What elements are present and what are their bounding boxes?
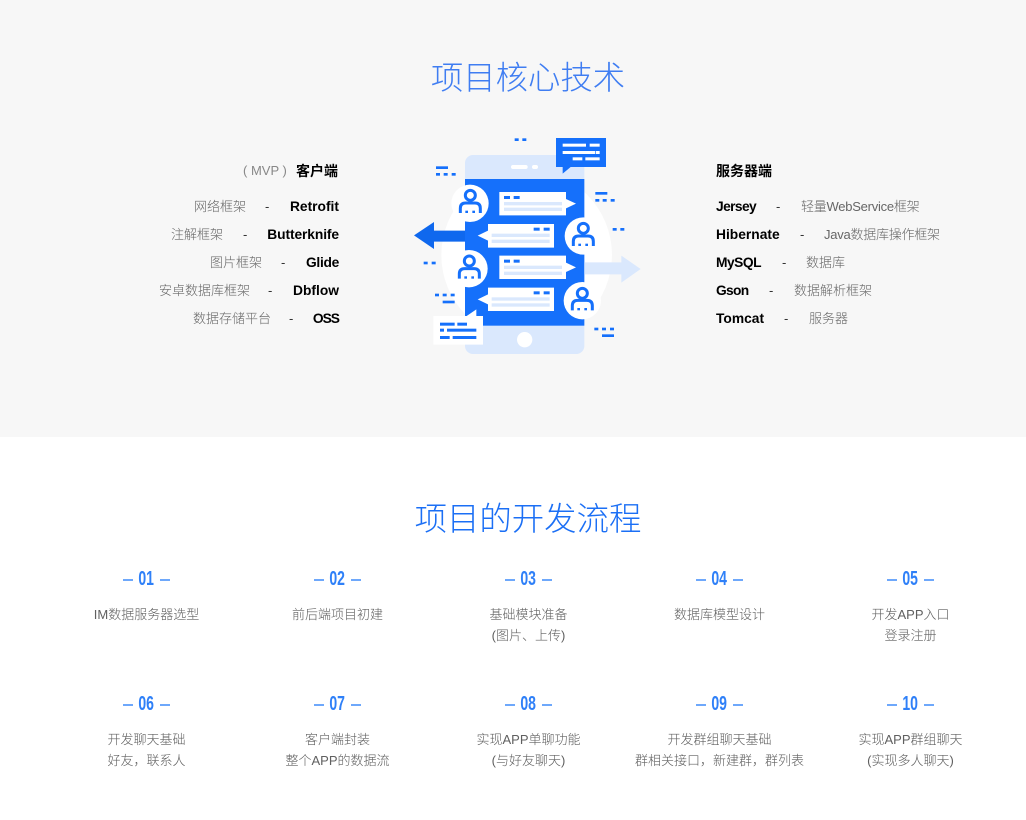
server row: Tomcat: 服务器 [809, 311, 848, 326]
client row: Dbflow [159, 283, 339, 298]
speech bubble bottom [433, 309, 483, 345]
server row: Tomcat: Tomcat [716, 311, 764, 326]
step 03: (图片、上传) [492, 628, 565, 643]
client row: Butterknife [171, 227, 339, 242]
heading: client [243, 163, 338, 179]
client row: Dbflow: - [268, 283, 272, 298]
step 07: 07 [330, 693, 345, 715]
client row: Glide: 图片框架 [210, 255, 262, 270]
step 10: 实现APP群组聊天 [858, 732, 962, 747]
client row: OSS: - [289, 311, 293, 326]
step 09 [635, 693, 804, 768]
client row: Glide [210, 255, 339, 270]
step 06: 好友，联系人 [107, 753, 186, 768]
step 09: 09 [712, 693, 727, 715]
client row: Retrofit [194, 199, 339, 214]
title: development process: 项目的开发流程 [415, 501, 641, 537]
step 08: 实现APP单聊功能 [476, 732, 580, 747]
step 02: 02 [330, 568, 345, 590]
step 01 [94, 568, 199, 622]
server row: Tomcat [716, 311, 848, 326]
server row: Jersey: Jersey [716, 199, 756, 214]
step 02 [292, 568, 383, 622]
heading: client: ( MVP ) [243, 163, 287, 178]
step 05: 开发APP入口 [871, 607, 950, 622]
server row: Tomcat: - [784, 311, 788, 326]
arrow left [414, 222, 465, 249]
heading: server: 服务器端 [716, 163, 772, 179]
server row: Jersey: 轻量WebService框架 [801, 199, 919, 214]
step 08 [476, 693, 580, 768]
step 04 [674, 568, 765, 622]
server row: MySQL [716, 255, 845, 270]
heading: client: 客户端 [296, 163, 338, 179]
step 10: (实现多人聊天) [867, 753, 954, 768]
server row: MySQL: 数据库 [806, 255, 845, 270]
server row: Gson: Gson [716, 283, 748, 298]
server row: Hibernate [716, 227, 940, 242]
client row: Retrofit: - [265, 199, 269, 214]
step 03: 03 [521, 568, 536, 590]
server row: Hibernate: Hibernate [716, 227, 780, 242]
step 05: 05 [903, 568, 918, 590]
client row: Butterknife: Butterknife [267, 227, 339, 242]
client row: Retrofit: Retrofit [290, 199, 339, 214]
server row: Hibernate: Java数据库操作框架 [824, 227, 940, 242]
step 04: 数据库模型设计 [674, 607, 765, 622]
step 08: 08 [521, 693, 536, 715]
step 04: 04 [712, 568, 727, 590]
panel: core technology [0, 0, 1026, 437]
avatars [450, 185, 602, 319]
speech bubble top [556, 138, 606, 174]
step 10: 10 [903, 693, 918, 715]
step 01: IM数据服务器选型 [94, 607, 199, 622]
step 06: 开发聊天基础 [107, 732, 186, 747]
server row: Gson [716, 283, 872, 298]
step 06 [107, 693, 186, 768]
client row: Glide: - [281, 255, 285, 270]
client row: OSS: 数据存储平台 [193, 311, 271, 326]
step 06: 06 [139, 693, 154, 715]
client row: OSS [193, 311, 340, 326]
background circle [441, 170, 612, 340]
step 07 [285, 693, 390, 768]
server row: Jersey [716, 199, 919, 214]
decorative dots [424, 138, 624, 337]
client row: OSS: OSS [313, 311, 339, 326]
step 02: 前后端项目初建 [292, 607, 383, 622]
step 05: 登录注册 [884, 628, 936, 643]
illustration: phone chat [414, 138, 640, 354]
step 07: 客户端封装 [305, 732, 370, 747]
server row: Hibernate: - [800, 227, 804, 242]
phone body [465, 155, 584, 354]
arrow right [584, 256, 641, 283]
server row: Jersey: - [776, 199, 780, 214]
step 05 [871, 568, 950, 643]
step 03: 基础模块准备 [489, 607, 568, 622]
step 01: 01 [139, 568, 154, 590]
client row: Dbflow: 安卓数据库框架 [159, 283, 250, 298]
step 07: 整个APP的数据流 [285, 753, 390, 768]
server row: Gson: 数据解析框架 [794, 283, 872, 298]
client row: Butterknife: 注解框架 [171, 227, 223, 242]
client row: Butterknife: - [243, 227, 247, 242]
step 09: 开发群组聊天基础 [667, 732, 772, 747]
server row: MySQL: MySQL [716, 255, 761, 270]
step 09: 群相关接口，新建群，群列表 [635, 753, 804, 768]
client row: Retrofit: 网络框架 [194, 199, 246, 214]
step 03 [489, 568, 568, 643]
step 10 [858, 693, 962, 768]
client row: Dbflow: Dbflow [293, 283, 339, 298]
client row: Glide: Glide [306, 255, 339, 270]
title: core technology: 项目核心技术 [431, 60, 625, 96]
step 08: (与好友聊天) [492, 753, 565, 768]
server row: MySQL: - [782, 255, 786, 270]
chat bubbles [478, 192, 576, 311]
server row: Gson: - [769, 283, 773, 298]
